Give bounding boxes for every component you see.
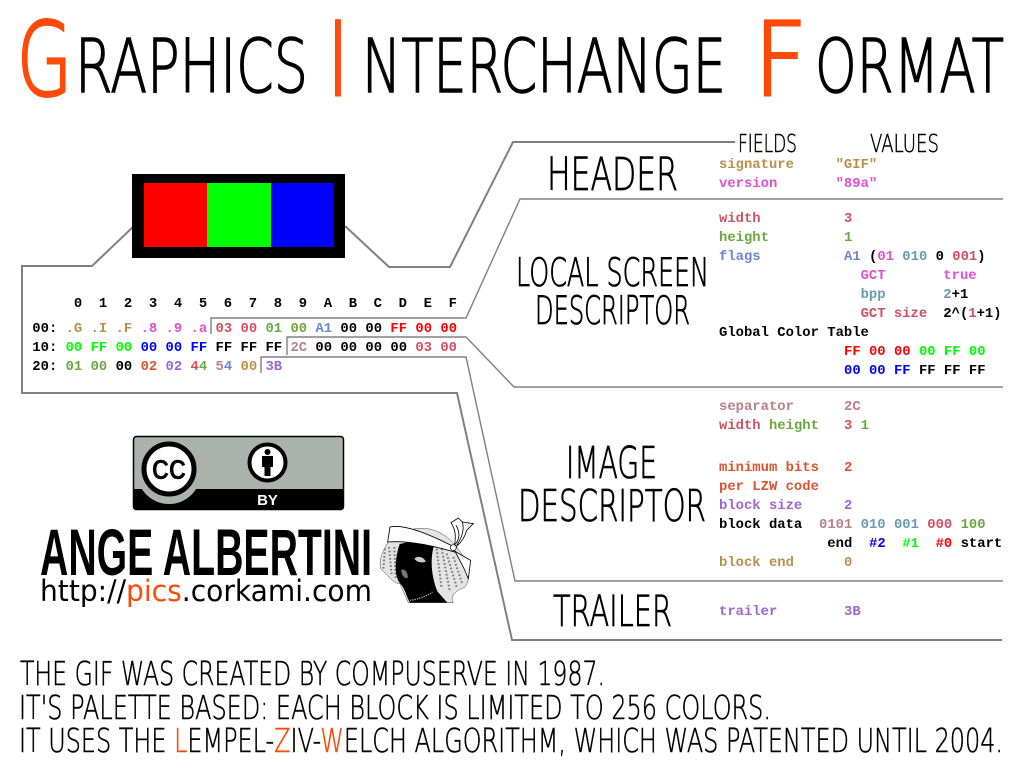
local screen descriptor fields: 3 <box>844 211 852 227</box>
hex dump: 20: 01 00 00 02 02 44 54 00 3B <box>32 359 283 375</box>
column headings: VALUES <box>870 129 939 158</box>
image descriptor fields: block size <box>719 498 802 514</box>
title: NTERCHANGE <box>362 24 726 110</box>
image descriptor fields: block data <box>719 517 802 533</box>
image descriptor fields: minimum bits <box>719 460 819 476</box>
image descriptor fields: start <box>961 536 1002 552</box>
local screen descriptor fields: GCT size <box>861 306 927 322</box>
bottom notes <box>19 654 1003 760</box>
section labels: LOCAL SCREEN <box>516 251 709 296</box>
image descriptor fields: 2 <box>844 460 852 476</box>
section labels: DESCRIPTOR <box>535 289 690 334</box>
connector lines <box>22 142 1003 640</box>
image descriptor fields: #0 <box>936 536 952 552</box>
image descriptor fields: #1 <box>902 536 919 552</box>
local screen descriptor fields: height <box>719 230 769 246</box>
image descriptor fields: width height <box>719 418 819 434</box>
local screen descriptor fields: flags <box>719 249 761 265</box>
title: RAPHICS <box>75 24 308 110</box>
local screen descriptor fields: bpp <box>861 287 886 303</box>
column headings: FIELDS <box>738 129 797 158</box>
header fields: signature <box>719 157 794 173</box>
trailer fields: trailer <box>719 604 777 620</box>
header fields: "GIF" <box>836 157 877 173</box>
image descriptor fields: separator <box>719 399 794 415</box>
header fields: version <box>719 176 777 192</box>
section labels: IMAGE <box>566 438 657 489</box>
local screen descriptor fields: GCT <box>861 268 886 284</box>
image descriptor fields: #2 <box>869 536 886 552</box>
image descriptor fields: per LZW code <box>719 479 819 495</box>
trailer fields: 3B <box>844 604 861 620</box>
author url: http://pics.corkami.com <box>40 574 372 608</box>
header fields <box>719 157 877 192</box>
image descriptor fields: 0101 010 001 000 100 <box>819 517 986 533</box>
title: G <box>17 1 72 120</box>
column headings <box>738 129 939 158</box>
local screen descriptor fields: Global Color Table <box>719 325 869 341</box>
CC BY badge: BY <box>257 492 278 509</box>
image descriptor fields: 3 1 <box>844 418 869 434</box>
hex dump: 00: .G .I .F .8 .9 .a 03 00 01 00 A1 00 00 FF 00 00 <box>32 321 457 337</box>
section labels <box>516 148 709 637</box>
image descriptor fields <box>719 399 1002 571</box>
section labels: HEADER <box>547 148 678 201</box>
hex dump: 10: 00 FF 00 00 00 FF FF FF FF 2C 00 00 00 00 03 00 <box>32 340 457 356</box>
author name: ANGE ALBERTINI <box>40 515 372 589</box>
image descriptor fields: 2C <box>844 399 861 415</box>
image descriptor fields: end <box>827 536 852 552</box>
local screen descriptor fields: FF 00 00 00 FF 00 <box>844 344 986 360</box>
CC BY badge: CC <box>152 454 186 485</box>
icon: author portrait <box>380 518 473 603</box>
image descriptor fields: 2 <box>844 498 852 514</box>
image descriptor fields: block end <box>719 555 794 571</box>
GIF image: three pixels <box>132 174 345 258</box>
header fields: "89a" <box>836 176 877 192</box>
bottom notes: THE GIF WAS CREATED BY COMPUSERVE IN 1987. <box>20 654 605 693</box>
title: F <box>754 1 807 120</box>
section labels: DESCRIPTOR <box>518 481 706 532</box>
trailer fields <box>719 604 861 620</box>
local screen descriptor fields: 00 00 FF FF FF FF <box>844 363 986 379</box>
title <box>17 1 1004 120</box>
local screen descriptor fields: A1 (01 010 0 001) <box>844 249 986 265</box>
title: I <box>327 1 349 120</box>
local screen descriptor fields: true <box>943 268 977 284</box>
local screen descriptor fields: 2+1 <box>943 287 968 303</box>
image descriptor fields: 0 <box>844 555 852 571</box>
local screen descriptor fields: 2^(1+1) <box>943 306 1002 322</box>
hex dump <box>32 296 457 375</box>
CC BY badge <box>133 436 344 510</box>
local screen descriptor fields: width <box>719 211 761 227</box>
local screen descriptor fields: 1 <box>844 230 852 246</box>
section labels: TRAILER <box>553 587 672 637</box>
local screen descriptor fields <box>719 211 1002 379</box>
hex dump: 0 1 2 3 4 5 6 7 8 9 A B C D E F <box>32 296 457 312</box>
